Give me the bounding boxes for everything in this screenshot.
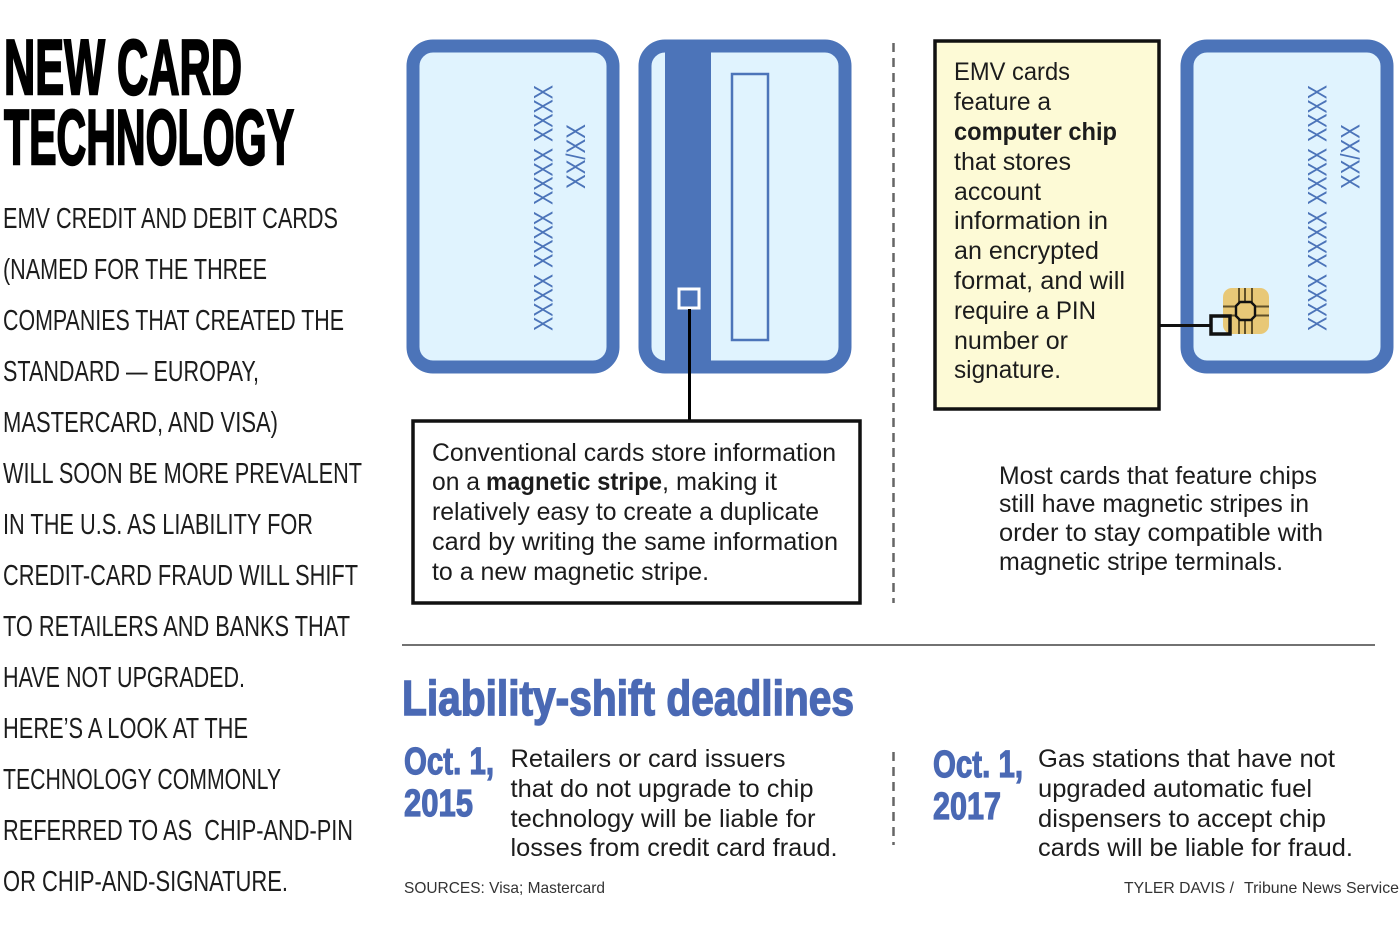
callout: EMV chip: an encrypted (954, 237, 1099, 265)
deadline: 2015: 2015 (404, 783, 473, 825)
intro text block: WILL SOON BE MORE PREVALENT (3, 458, 362, 490)
sources: SOURCES: Visa; Mastercard (404, 880, 605, 897)
card front: conventional (413, 46, 613, 367)
callout: EMV chip: EMV cards (954, 58, 1070, 86)
callout: EMV chip: format, and will (954, 267, 1125, 295)
card front: conventional: XXXX XXXX XXXX XXXX (528, 85, 558, 331)
deadline: 2015: technology will be liable for (510, 805, 816, 833)
callout: magnetic stripe (413, 421, 860, 603)
credit: Tribune News Service (1244, 880, 1399, 897)
card front: EMV chip card (1159, 46, 1387, 367)
credit: TYLER DAVIS / (1124, 880, 1235, 897)
callout: magnetic stripe: , making it (662, 468, 777, 496)
intro text block: STANDARD — EUROPAY, (3, 356, 259, 388)
deadline: 2017: cards will be liable for fraud. (1038, 834, 1353, 862)
deadline: 2015 (404, 741, 838, 862)
deadline: 2017 (933, 744, 1353, 862)
credit (1124, 880, 1399, 897)
intro text block: EMV CREDIT AND DEBIT CARDS (3, 203, 338, 235)
deadline: 2017: Gas stations that have not (1038, 745, 1335, 773)
card front: EMV chip card: XX/XX (1336, 124, 1366, 189)
deadline: 2017: upgraded automatic fuel (1038, 775, 1312, 803)
card back: magnetic stripe (645, 40, 845, 422)
note: chips and stripes: magnetic stripe terminals. (999, 548, 1283, 576)
callout: magnetic stripe: relatively easy to create a duplicate (432, 498, 819, 526)
note: chips and stripes: still have magnetic stripes in (999, 490, 1309, 518)
intro text block: TECHNOLOGY COMMONLY (3, 764, 281, 796)
intro text block: HAVE NOT UPGRADED. (3, 662, 245, 694)
title (4, 23, 294, 181)
note: chips and stripes: Most cards that feature chips (999, 462, 1317, 490)
callout: EMV chip: signature. (954, 356, 1061, 384)
heading: liability-shift deadlines: Liability-shift deadlines (402, 672, 854, 726)
intro text block: COMPANIES THAT CREATED THE (3, 305, 344, 337)
deadline: 2017: dispensers to accept chip (1038, 805, 1326, 833)
deadline: 2015: Retailers or card issuers (510, 745, 786, 773)
deadline: 2017: 2017 (933, 786, 1001, 828)
deadline: 2015: Oct. 1, (404, 741, 494, 783)
callout: EMV chip: feature a (954, 88, 1051, 116)
intro text block: CREDIT-CARD FRAUD WILL SHIFT (3, 560, 358, 592)
card front: conventional: XX/XX (561, 124, 591, 189)
callout: EMV chip (935, 41, 1159, 409)
intro text block: (NAMED FOR THE THREE (3, 254, 267, 286)
callout: EMV chip: computer chip (954, 118, 1117, 146)
intro text block (3, 203, 362, 898)
intro text block: MASTERCARD, AND VISA) (3, 407, 278, 439)
deadline: 2015: that do not upgrade to chip (510, 775, 814, 803)
title: NEW CARD (4, 23, 242, 111)
callout: magnetic stripe: to a new magnetic stripe. (432, 558, 709, 586)
callout: EMV chip: number or (954, 327, 1068, 355)
intro text block: HERE’S A LOOK AT THE (3, 713, 248, 745)
callout: EMV chip: require a PIN (954, 297, 1096, 325)
intro text block: TO RETAILERS AND BANKS THAT (3, 611, 350, 643)
callout: EMV chip: that stores (954, 148, 1071, 176)
intro text block: IN THE U.S. AS LIABILITY FOR (3, 509, 313, 541)
title: TECHNOLOGY (4, 93, 294, 181)
deadline: 2015: losses from credit card fraud. (510, 834, 838, 862)
callout: magnetic stripe: on a (432, 468, 480, 496)
intro text block: OR CHIP-AND-SIGNATURE. (3, 866, 288, 898)
note: chips and stripes (999, 462, 1323, 576)
callout: magnetic stripe: card by writing the same information (432, 528, 838, 556)
vertical dashed divider (892, 43, 895, 603)
callout: EMV chip: information in (954, 207, 1108, 235)
callout: EMV chip: account (954, 178, 1041, 206)
deadline: 2017: Oct. 1, (933, 744, 1023, 786)
callout: magnetic stripe: Conventional cards store information (432, 439, 836, 467)
icon: chip (1223, 288, 1269, 334)
intro text block: REFERRED TO AS CHIP-AND-PIN (3, 815, 353, 847)
card front: EMV chip card: XXXX XXXX XXXX XXXX (1302, 85, 1332, 331)
note: chips and stripes: order to stay compatible with (999, 519, 1323, 547)
callout: magnetic stripe: magnetic stripe (486, 468, 662, 496)
